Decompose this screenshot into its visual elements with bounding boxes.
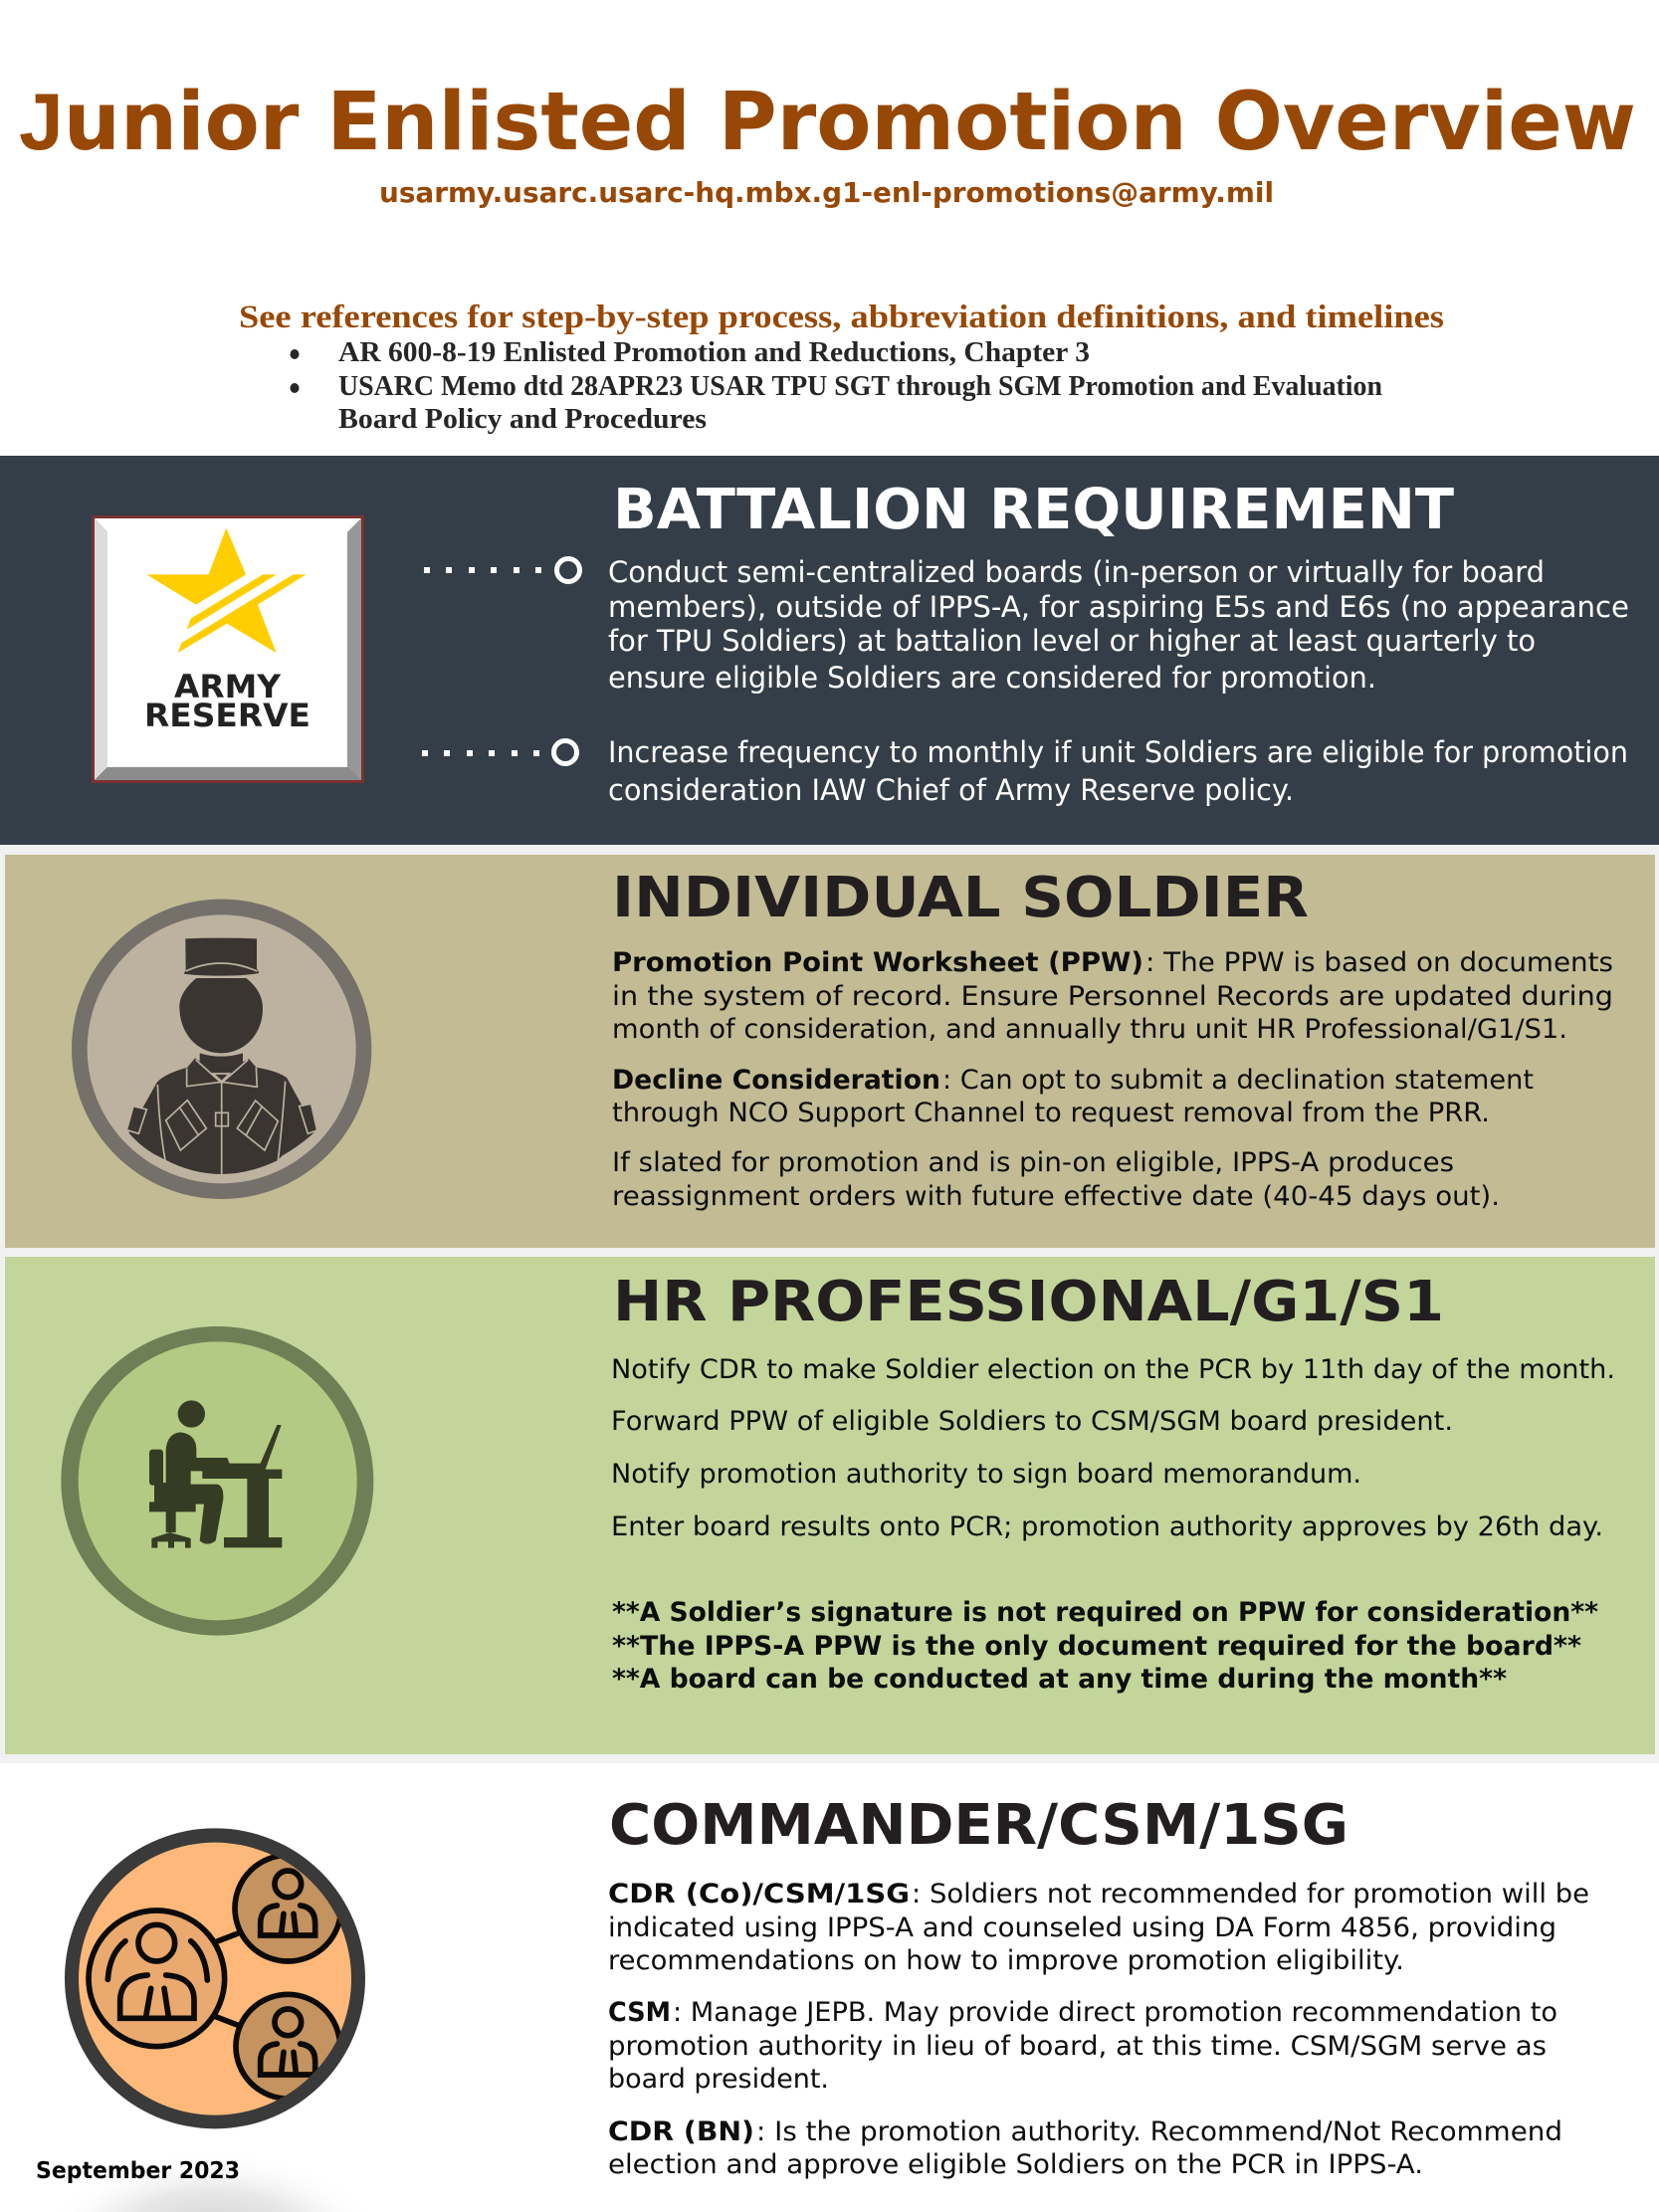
text: battalion commander [608, 2116, 1562, 2180]
panel: individual soldier [5, 855, 1655, 1248]
references block [239, 300, 1444, 435]
title: Junior Enlisted Promotion Overview [19, 76, 1636, 169]
text: csm: : Manage JEPB. May provide direct promotion recommendation to [673, 1997, 1557, 2028]
text: reassignment orders: If slated for promotion and is pin-on eligible, IPPS-A produces [612, 1147, 1454, 1178]
text: bold notes: **A board can be conducted at any time during the month** [612, 1664, 1507, 1695]
references heading: See references for step-by-step process, abbreviation definitions, and timelines [239, 300, 1444, 335]
background strip behind panels [0, 845, 1659, 1763]
text: company commander: indicated using IPPS-A and counseled using DA Form 4856, providing [608, 1912, 1556, 1943]
text: company commander: CDR (Co)/CSM/1SG [608, 1879, 910, 1910]
text: csm [608, 1997, 1557, 2095]
text: company commander [608, 1879, 1589, 1976]
heading: commander: COMMANDER/CSM/1SG [609, 1793, 1348, 1858]
connector: second bullet [422, 740, 577, 764]
text: bold notes: **A Soldier’s signature is not required on PPW for consideration** [612, 1597, 1598, 1628]
text: decline consideration: through NCO Support Channel to request removal from the PRR. [612, 1098, 1490, 1128]
text: decline consideration [612, 1065, 1534, 1128]
battalion text: first bullet: members), outside of IPPS-A, for aspiring E5s and E6s (no appearance [608, 590, 1629, 624]
text: reassignment orders [612, 1147, 1500, 1212]
icon: army reserve logo: ARMY [174, 668, 282, 705]
text: company commander: recommendations on how to improve promotion eligibility. [608, 1945, 1404, 1976]
date: September 2023 [36, 2158, 240, 2184]
icon: army reserve logo: RESERVE [144, 697, 311, 734]
contact email: usarmy.usarc.usarc-hq.mbx.g1-enl-promotions@army.mil [379, 176, 1274, 209]
connector: first bullet [424, 559, 579, 581]
text: promotion point worksheet: in the system of record. Ensure Personnel Records are updated during [612, 981, 1613, 1012]
text: hr tasks: Enter board results onto PCR; promotion authority approves by 26th day. [611, 1511, 1603, 1542]
text: csm: CSM [608, 1997, 671, 2028]
heading: hr professional: HR PROFESSIONAL/G1/S1 [613, 1270, 1444, 1334]
battalion text: first bullet: Conduct semi-centralized boards (in-person or virtually for board [608, 555, 1545, 589]
panel: battalion requirement [0, 456, 1659, 845]
text: csm: promotion authority in lieu of board, at this time. CSM/SGM serve as [608, 2031, 1547, 2062]
text: company commander: : Soldiers not recommended for promotion will be [912, 1879, 1589, 1910]
panel: hr professional [5, 1257, 1655, 1754]
battalion text: second bullet: consideration IAW Chief of Army Reserve policy. [608, 773, 1294, 807]
reference list: USARC Memo dtd 28APR23 USAR TPU SGT through SGM Promotion and Evaluation [338, 370, 1382, 402]
battalion text: second bullet: Increase frequency to monthly if unit Soldiers are eligible for promotion [608, 735, 1628, 769]
text: hr tasks: Forward PPW of eligible Soldiers to CSM/SGM board president. [611, 1406, 1453, 1437]
icon: army reserve logo [92, 515, 364, 783]
icon: person at desk [61, 1326, 373, 1636]
battalion text: first bullet: ensure eligible Soldiers are considered for promotion. [608, 661, 1376, 695]
text: csm: board president. [608, 2064, 829, 2095]
reference list [291, 336, 1382, 435]
heading: battalion requirement: BATTALION REQUIREMENT [613, 478, 1454, 542]
text: decline consideration: Decline Consideration [612, 1065, 940, 1096]
battalion text: first bullet [608, 555, 1629, 695]
reference list: Board Policy and Procedures [338, 403, 707, 435]
text: battalion commander: : Is the promotion authority. Recommend/Not Recommend [756, 2116, 1562, 2147]
text: hr tasks: Notify CDR to make Soldier election on the PCR by 11th day of the month. [611, 1354, 1615, 1385]
text: promotion point worksheet: Promotion Point Worksheet (PPW) [612, 947, 1143, 978]
icon: connected people [65, 1828, 365, 2128]
text: battalion commander: CDR (BN) [608, 2116, 754, 2147]
text: reassignment orders: reassignment orders with future effective date (40-45 days out). [612, 1181, 1500, 1212]
reference list: AR 600-8-19 Enlisted Promotion and Reductions, Chapter 3 [338, 336, 1090, 368]
heading: individual soldier: INDIVIDUAL SOLDIER [612, 866, 1309, 930]
text: bold notes [612, 1597, 1598, 1695]
text: promotion point worksheet [612, 947, 1613, 1045]
text: promotion point worksheet: : The PPW is based on documents [1145, 947, 1613, 978]
battalion text: first bullet: for TPU Soldiers) at battalion level or higher at least quarterly to [608, 624, 1536, 658]
text: bold notes: **The IPPS-A PPW is the only document required for the board** [612, 1631, 1581, 1662]
text: hr tasks [611, 1354, 1615, 1542]
panel: commander [36, 1793, 1589, 2212]
floor shadow [43, 2151, 381, 2212]
text: battalion commander: election and approve eligible Soldiers on the PCR in IPPS-A. [608, 2149, 1423, 2180]
icon: soldier [72, 900, 371, 1199]
text: hr tasks: Notify promotion authority to sign board memorandum. [611, 1459, 1361, 1490]
text: promotion point worksheet: month of consideration, and annually thru unit HR Professional/G1/S1. [612, 1014, 1567, 1045]
text: decline consideration: : Can opt to submit a declination statement [942, 1065, 1534, 1096]
battalion text: second bullet [608, 735, 1628, 807]
